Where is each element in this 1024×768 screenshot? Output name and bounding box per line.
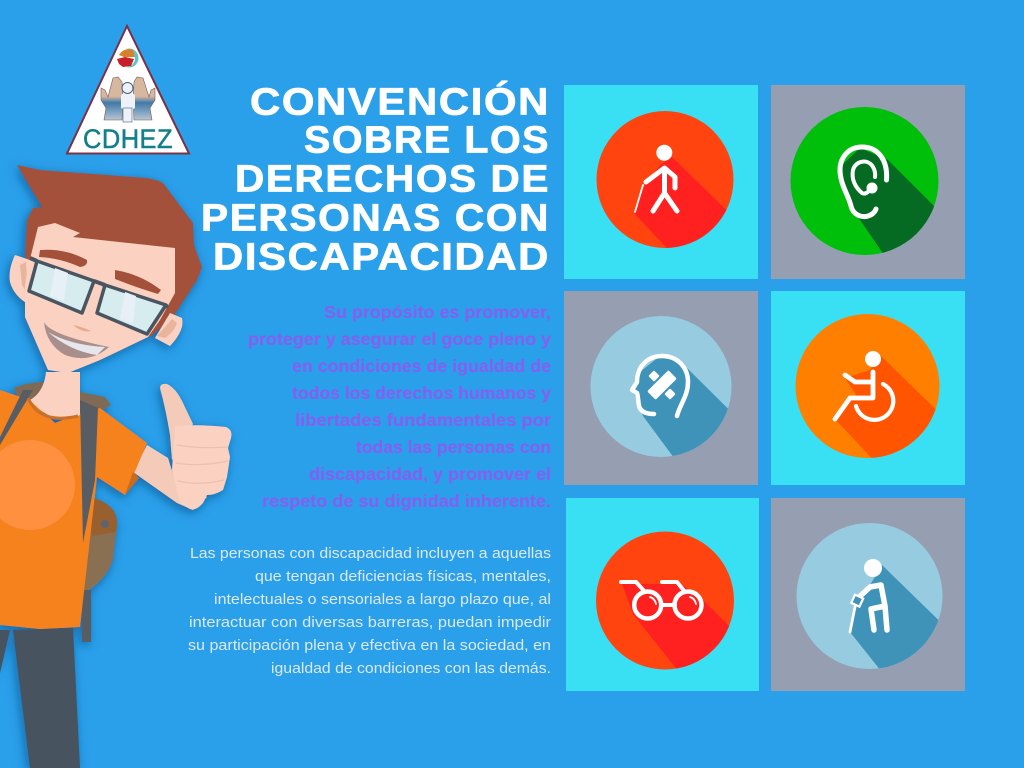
character backpack straps (0, 390, 98, 543)
definition paragraph: que tengan deficiencias físicas, mentales, (255, 569, 551, 585)
title: PERSONAS CON (201, 198, 550, 240)
purpose paragraph: en condiciones de igualdad de (292, 356, 551, 376)
icon: glasses (621, 582, 702, 618)
character backpack (14, 382, 117, 642)
character face (25, 223, 175, 373)
logo sun emblem (117, 48, 138, 68)
purpose paragraph: Su propósito es promover, (324, 302, 551, 322)
title: SOBRE LOS (304, 120, 550, 162)
panel: hearing disability, ear (771, 85, 965, 279)
title: DISCAPACIDAD (213, 236, 550, 278)
character glasses (29, 258, 167, 334)
character: smiling student with thumb up (0, 165, 231, 768)
purpose paragraph: libertades fundamentales por (295, 410, 551, 430)
logo wordmark: CDHEZ (83, 124, 173, 154)
logo hands and figure (101, 77, 155, 122)
character eyebrows (39, 250, 161, 294)
character smile (44, 322, 109, 358)
icon: person with cane (635, 145, 677, 212)
icon: elderly person (850, 559, 887, 632)
character hair (17, 165, 202, 337)
character arm and thumb (133, 384, 231, 510)
definition paragraph (188, 546, 551, 677)
panel: visual disability, glasses (566, 498, 765, 705)
title: CONVENCIÓN (250, 80, 550, 124)
definition paragraph: intelectuales o sensoriales a largo plazo que, al (214, 592, 551, 608)
purpose paragraph: respeto de su dignidad inherente. (262, 491, 551, 511)
definition paragraph: igualdad de condiciones con las demás. (271, 661, 551, 677)
panel: mental disability, head with bandage (564, 291, 758, 485)
purpose paragraph (248, 302, 551, 511)
title: DERECHOS DE (235, 158, 550, 200)
definition paragraph: interactuar con diversas barreras, puedan impedir (189, 615, 551, 631)
panel: visual disability, person with cane (564, 85, 758, 279)
character collar (28, 398, 78, 418)
logo: CDHEZ (67, 26, 189, 154)
character nose (73, 325, 91, 331)
purpose paragraph: todas las personas con (356, 437, 551, 457)
purpose paragraph: todos los derechos humanos y (292, 383, 551, 403)
definition paragraph: su participación plena y efectiva en la sociedad, en (188, 638, 551, 654)
definition paragraph: Las personas con discapacidad incluyen a aquellas (190, 546, 551, 562)
purpose paragraph: discapacidad, y promover el (309, 464, 551, 484)
title (201, 80, 550, 278)
icon: ear (840, 147, 887, 217)
panel: physical disability, wheelchair (771, 291, 965, 485)
purpose paragraph: proteger y asegurar el goce pleno y (248, 329, 551, 349)
icon: head with bandage (632, 356, 688, 416)
character shirt (0, 390, 147, 629)
character neck (30, 372, 80, 419)
character legs (0, 628, 80, 768)
icon: wheelchair user (835, 351, 893, 420)
character ears (10, 255, 182, 346)
panel: elderly person with walking stick (771, 498, 965, 691)
